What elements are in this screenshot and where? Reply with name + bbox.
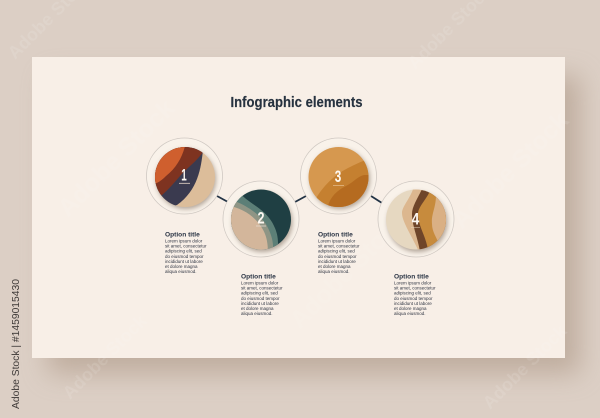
option 4 text xyxy=(394,274,436,316)
option 1 text: Option title xyxy=(165,232,200,238)
option 3 text: adipiscing elit, sed xyxy=(318,249,355,254)
option 4 text: sit amet, consectetur xyxy=(394,286,436,291)
option 3 text: Lorem ipsum dolor xyxy=(318,238,356,244)
watermark: Adobe Stock xyxy=(59,310,151,403)
option 2 text xyxy=(241,274,283,316)
step 4 circle xyxy=(378,181,454,257)
option 3 text: Option title xyxy=(318,232,353,238)
watermark: Adobe Stock xyxy=(479,320,571,413)
step 3 circle: 3 xyxy=(335,168,341,186)
option 2 text: aliqua eiusmod. xyxy=(241,311,273,316)
option 1 text xyxy=(165,232,207,274)
option 1 text: Lorem ipsum dolor xyxy=(165,238,203,244)
option 3 text xyxy=(318,232,360,274)
option 1 text: et dolore magna xyxy=(165,264,198,269)
step 4 circle: 4 xyxy=(412,210,420,228)
option 1 text: do eiusmod tempor xyxy=(165,254,204,259)
stock id text: Adobe Stock | #1459015430 xyxy=(10,279,22,409)
option 2 text: incididunt ut labore xyxy=(241,301,279,306)
option 2 text: do eiusmod tempor xyxy=(241,296,280,301)
option 1 text: aliqua eiusmod. xyxy=(165,269,197,274)
watermark: Adobe Stock xyxy=(446,106,574,234)
watermark: Adobe Stock xyxy=(52,94,180,222)
option 3 text: sit amet, consectetur xyxy=(318,244,360,249)
option 4 text: aliqua eiusmod. xyxy=(394,311,426,316)
option 4 text: Option title xyxy=(394,274,429,280)
option 2 text: adipiscing elit, sed xyxy=(241,291,278,296)
panel shadow xyxy=(48,76,580,374)
step 2 circle xyxy=(223,181,299,257)
title: Infographic elements xyxy=(230,95,362,111)
panel xyxy=(32,57,565,358)
option 4 text: adipiscing elit, sed xyxy=(394,291,431,296)
watermark: Adobe Stock xyxy=(284,206,412,334)
option 4 text: et dolore magna xyxy=(394,306,427,311)
step 2 circle: 2 xyxy=(258,210,264,228)
option 3 text: et dolore magna xyxy=(318,264,351,269)
step 1 circle: 1 xyxy=(181,166,187,184)
option 3 text: incididunt ut labore xyxy=(318,259,356,264)
step 1 circle xyxy=(146,138,222,214)
option 2 text: Lorem ipsum dolor xyxy=(241,280,279,286)
option 4 text: Lorem ipsum dolor xyxy=(394,280,432,286)
option 2 text: sit amet, consectetur xyxy=(241,286,283,291)
step 3 circle xyxy=(300,138,376,214)
option 4 text: do eiusmod tempor xyxy=(394,296,433,301)
option 2 text: et dolore magna xyxy=(241,306,274,311)
option 1 text: adipiscing elit, sed xyxy=(165,249,202,254)
option 1 text: sit amet, consectetur xyxy=(165,244,207,249)
option 3 text: aliqua eiusmod. xyxy=(318,269,350,274)
option 1 text: incididunt ut labore xyxy=(165,259,203,264)
option 3 text: do eiusmod tempor xyxy=(318,254,357,259)
connector lines xyxy=(217,196,382,203)
option 2 text: Option title xyxy=(241,274,276,280)
option 4 text: incididunt ut labore xyxy=(394,301,432,306)
